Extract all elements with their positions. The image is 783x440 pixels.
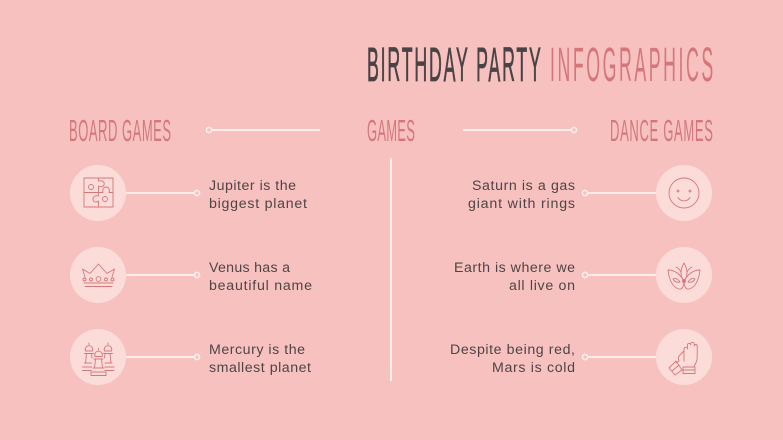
title xyxy=(367,37,713,92)
text: mercury: smallest planet xyxy=(209,360,311,376)
connector: games to dance games xyxy=(463,127,577,133)
text: mars xyxy=(450,342,575,376)
item: crown xyxy=(70,247,312,303)
text: mercury: Mercury is the xyxy=(209,342,305,358)
text: jupiter: biggest planet xyxy=(209,196,307,212)
item: smiley xyxy=(468,165,712,221)
text: saturn: Saturn is a gas xyxy=(472,178,575,194)
heading: dance games: DANCE GAMES xyxy=(610,114,713,149)
text: mercury xyxy=(209,342,311,376)
item: puzzle xyxy=(70,165,307,221)
text: jupiter xyxy=(209,178,307,212)
text: saturn: giant with rings xyxy=(468,196,575,212)
icon: puzzle xyxy=(84,178,113,207)
text: earth: all live on xyxy=(509,278,575,294)
title: INFOGRAPHICS xyxy=(550,37,713,92)
text: venus: beautiful name xyxy=(209,278,312,294)
text: mars: Mars is cold xyxy=(492,360,575,376)
text: venus xyxy=(209,260,312,294)
icon: smiley xyxy=(669,178,699,208)
vertical divider xyxy=(390,158,392,381)
item: mask xyxy=(454,247,712,303)
icon: crown xyxy=(82,264,114,286)
item: chess xyxy=(70,329,311,385)
text: venus: Venus has a xyxy=(209,260,290,276)
icon: chess pieces xyxy=(82,343,114,376)
text: earth: Earth is where we xyxy=(454,260,575,276)
text: earth xyxy=(454,260,575,294)
icon: carnival mask xyxy=(668,263,700,289)
heading: games: GAMES xyxy=(367,114,415,149)
title: BIRTHDAY PARTY xyxy=(367,37,541,92)
text: jupiter: Jupiter is the xyxy=(209,178,296,194)
icon: clapping hands xyxy=(669,342,697,375)
heading: board games: BOARD GAMES xyxy=(69,114,171,149)
text: mars: Despite being red, xyxy=(450,342,575,358)
item: hands xyxy=(450,329,712,385)
text: saturn xyxy=(468,178,575,212)
connector: board games to games xyxy=(206,127,320,133)
